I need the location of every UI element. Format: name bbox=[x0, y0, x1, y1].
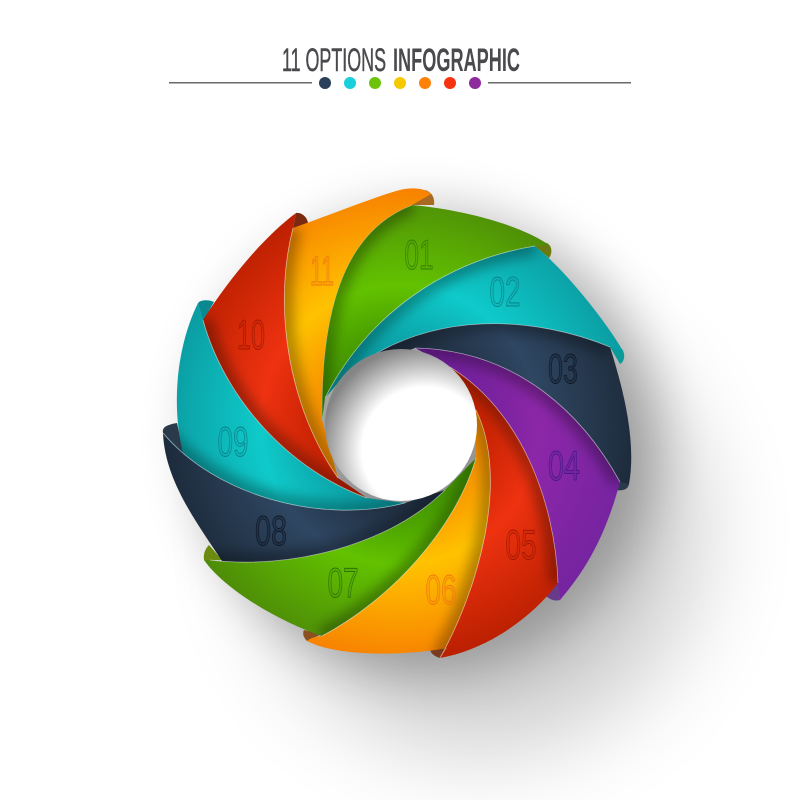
blade 02 teal: 02 bbox=[490, 268, 520, 315]
blade 01 green bbox=[322, 205, 549, 420]
blade 10 red: 10 bbox=[237, 311, 265, 358]
centre hole bbox=[325, 349, 477, 501]
title: 11 OPTIONS bbox=[282, 42, 386, 78]
blade 05 red bbox=[440, 367, 558, 658]
wheel drop shadow bbox=[193, 208, 700, 750]
blade 06 orange: 06 bbox=[426, 566, 456, 613]
blade 11 orange bbox=[284, 188, 431, 478]
blade 04 purple bbox=[415, 348, 620, 600]
title: INFOGRAPHIC bbox=[393, 42, 520, 78]
curled blade tips bbox=[163, 190, 629, 658]
blade 09 teal bbox=[163, 303, 405, 510]
blade 08 navy: 08 bbox=[255, 507, 287, 554]
blade 07 green bbox=[204, 458, 476, 636]
blade 05 red: 05 bbox=[506, 521, 536, 568]
blade 01 green: 01 bbox=[404, 231, 434, 278]
blade 10 red bbox=[203, 213, 367, 498]
blade 06 orange bbox=[307, 410, 490, 658]
blade 04 purple: 04 bbox=[548, 442, 580, 489]
title rule and colour dots bbox=[169, 77, 631, 89]
blade 08 navy bbox=[163, 433, 445, 562]
blade 11 orange: 11 bbox=[310, 247, 334, 294]
blade 07 green: 07 bbox=[328, 559, 358, 606]
blade 02 teal bbox=[325, 246, 623, 398]
blade 03 navy: 03 bbox=[548, 345, 578, 392]
blade 03 navy bbox=[376, 323, 632, 484]
blade 09 teal: 09 bbox=[218, 418, 248, 465]
